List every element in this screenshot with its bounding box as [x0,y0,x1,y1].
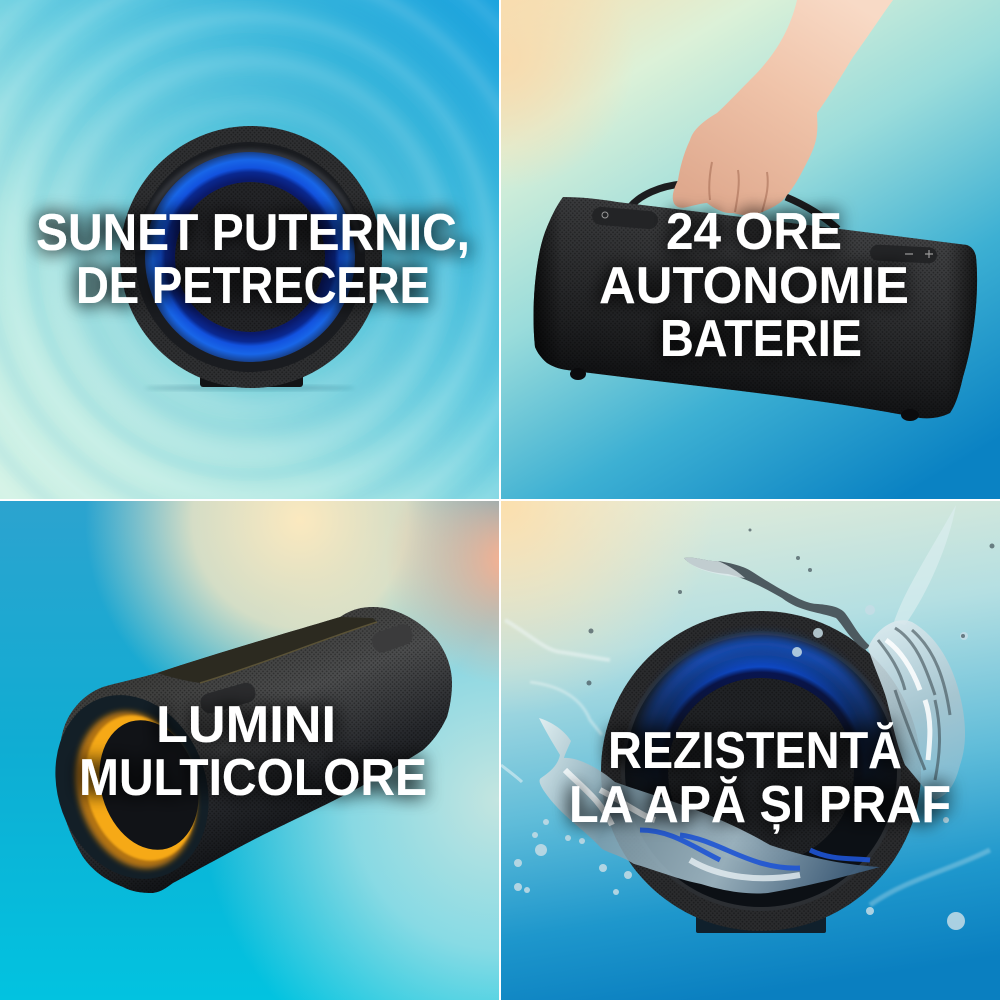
heading: water and dust resistant [569,722,951,834]
icon: water splash [501,505,990,905]
heading: 24 hours battery life: 24 ORE [666,203,842,261]
heading: powerful party sound [36,204,470,315]
sound wave rings [0,0,499,499]
speaker ring [55,695,208,879]
heading: multicolor lights: MULTICOLORE [79,749,427,807]
icon: round speaker [601,611,921,933]
heading: powerful party sound: SUNET PUTERNIC, [36,204,470,262]
icon: water droplets [514,605,968,930]
panel: water and dust resistance [501,501,1000,1000]
heading: multicolor lights: LUMINI [156,696,336,754]
panel: multicolor lights [0,501,499,1000]
icon: tilted speaker with orange light [55,607,452,893]
heading: powerful party sound: DE PETRECERE [76,257,430,315]
icon: round speaker front [120,126,382,390]
icon: hand holding speaker [673,0,893,215]
heading: 24 hours battery life [599,203,909,368]
icon: handle [630,184,838,229]
icon: horizontal speaker [534,197,977,421]
panel: powerful sound [0,0,499,499]
heading: water and dust resistant: REZISTENTĂ [608,722,902,780]
control strip [157,617,377,683]
heading: water and dust resistant: LA APĂ ȘI PRAF [569,776,951,834]
heading: 24 hours battery life: AUTONOMIE [599,257,909,315]
heading: 24 hours battery life: BATERIE [660,310,862,368]
heading: multicolor lights [79,696,427,807]
panel: battery life [501,0,1000,499]
